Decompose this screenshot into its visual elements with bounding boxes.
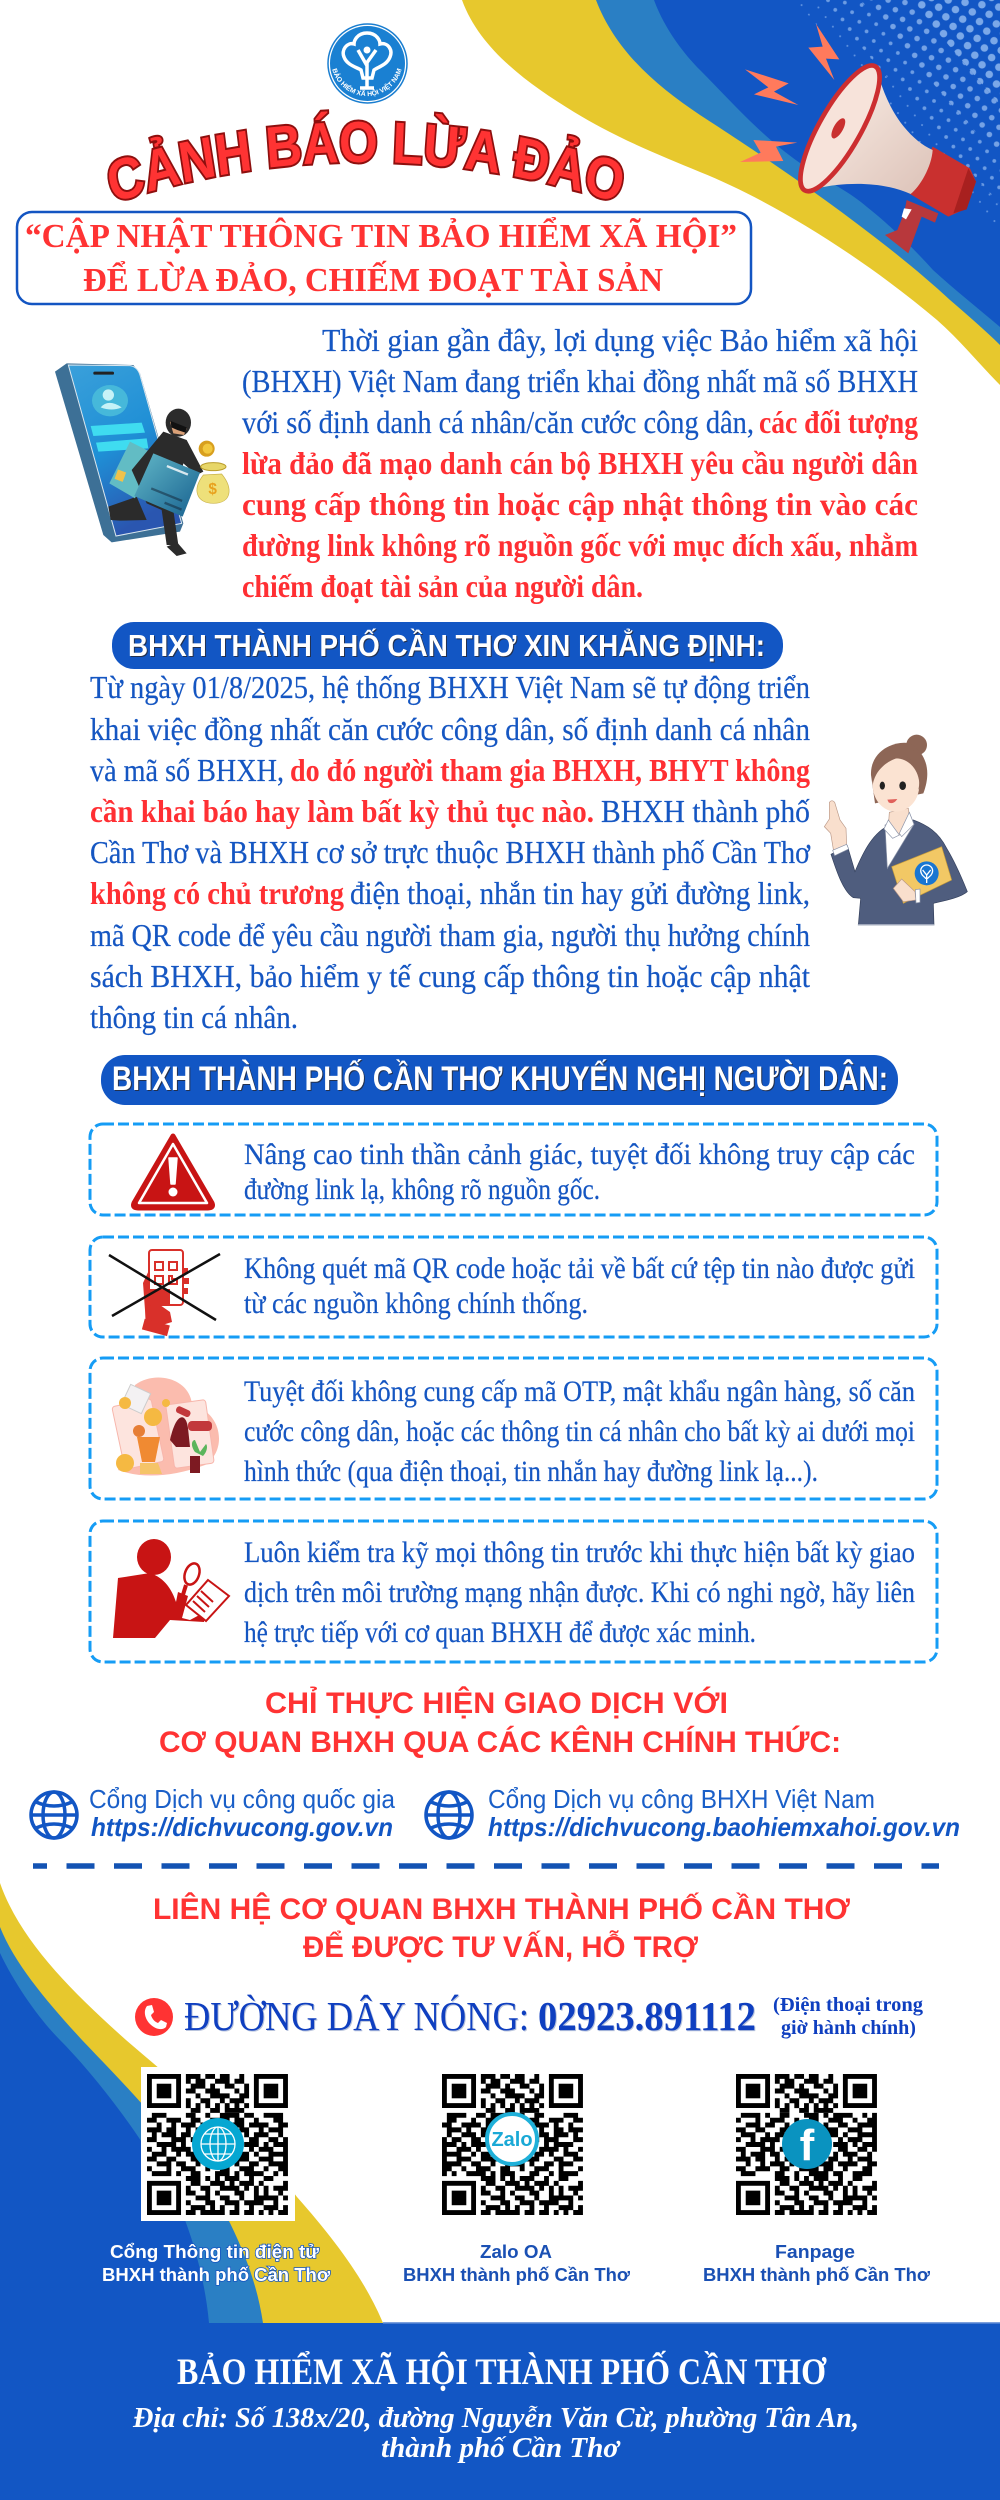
text block: statement paragraph: BHXH thành phố [601,794,810,829]
panel: subtitle box [17,212,751,304]
QR code: Fanpage [736,2076,877,2213]
text block: intro paragraph: đường link không rõ nguồn gốc với mục đích xấu, nhằm [242,528,918,563]
panel: card cảnh giác [90,1124,937,1215]
icon: globe BHXH portal [426,1792,472,1838]
background: top right swoosh [462,0,1000,385]
caption: Zalo: BHXH thành phố Cần Thơ [403,2264,631,2285]
icon: thief with phone and credit card [55,363,229,556]
text block: statement paragraph: điện thoại, nhắn tin hay gửi đường link, [350,876,810,911]
link: national portal: https://dichvucong.gov.vn [91,1812,393,1842]
text: hotline: 02923.891112 [538,1993,756,2039]
text block: statement paragraph: do đó người tham gia BHXH, BHYT không [290,753,810,788]
text: hotline hours [773,1994,923,2039]
panel: footer: Địa chỉ: Số 138x/20, đường Nguyễn Văn Cừ, phường Tân An, [132,2403,859,2434]
text block: statement paragraph: sách BHXH, bảo hiểm y tế cung cấp thông tin hoặc cập nhật [90,959,810,994]
panel: subtitle box: “CẬP NHẬT THÔNG TIN BẢO HIỂM XÃ HỘI” [25,217,737,255]
text block: intro paragraph [242,323,918,604]
heading: liên hệ: ĐỂ ĐƯỢC TƯ VẤN, HỖ TRỢ [303,1930,698,1964]
logo: BHXH emblem: BẢO HIỂM XÃ HỘI VIỆT NAM [332,68,402,96]
text: hotline hours: (Điện thoại trong [773,1994,923,2016]
heading: xin khẳng định: BHXH THÀNH PHỐ CẦN THƠ XIN KHẲNG ĐỊNH: [128,627,765,663]
panel: card OTP: Tuyệt đối không cung cấp mã OTP, mật khẩu ngân hàng, số căn [244,1375,915,1408]
icon: woman officer pointing [824,735,967,925]
heading: kênh chính thức: CƠ QUAN BHXH QUA CÁC KÊNH CHÍNH THỨC: [159,1725,841,1759]
text block: statement paragraph: Từ ngày 01/8/2025, hệ thống BHXH Việt Nam sẽ tự động triển [90,670,810,705]
heading: kênh chính thức: CHỈ THỰC HIỆN GIAO DỊCH VỚI [265,1686,728,1720]
text block: statement paragraph: không có chủ trương [90,876,344,911]
text block: intro paragraph: chiếm đoạt tài sản của người dân. [242,569,643,604]
panel: card cảnh giác: Nâng cao tinh thần cảnh giác, tuyệt đối không truy cập các [244,1138,915,1171]
icon: thief with phone and credit card: $ [208,481,217,498]
caption: Fanpage [703,2241,931,2285]
caption: portal: BHXH thành phố Cần Thơ [102,2264,331,2285]
icon: phone [135,1998,173,2036]
text: hotline hours: giờ hành chính) [781,2017,916,2039]
link: BHXH portal [488,1784,960,1842]
link: national portal [89,1784,396,1842]
icon: crossed out QR phone in hand [109,1250,220,1336]
caption: Fanpage: Fanpage [775,2241,855,2262]
text: hotline: ĐƯỜNG DÂY NÓNG: [184,1993,529,2039]
panel: card mã QR [90,1237,937,1337]
caption: Zalo: Zalo OA [480,2241,552,2262]
text block: statement paragraph: thông tin cá nhân. [90,1000,298,1035]
panel: card OTP: hình thức (qua điện thoại, tin nhắn hay đường link lạ...). [244,1455,818,1488]
panel: card kiểm tra: dịch trên môi trường mạng nhận được. Khi có nghi ngờ, hãy liên [244,1576,915,1609]
panel: footer: thành phố Cần Thơ [381,2433,621,2464]
text block: statement paragraph: cần khai báo hay làm bất kỳ thủ tục nào. [90,794,594,829]
QR code: portal [141,2067,295,2221]
icon: warning triangle [134,1136,212,1208]
caption: portal: Cổng Thông tin điện tử [110,2241,320,2262]
caption: Zalo [403,2241,631,2285]
text block: intro paragraph: (BHXH) Việt Nam đang triển khai đồng nhất mã số BHXH [242,364,918,399]
text block: statement paragraph: mã QR code để yêu cầu người tham gia, người thụ hưởng chính [90,918,810,953]
panel: footer [0,2322,1000,2500]
text block: intro paragraph: với số định danh cá nhân/căn cước công dân, [242,405,754,440]
link: BHXH portal: Cổng Dịch vụ công BHXH Việt Nam [488,1784,875,1814]
text block: statement paragraph: Cần Thơ và BHXH cơ sở trực thuộc BHXH thành phố Cần Thơ [90,835,810,870]
heading: xin khẳng định [112,622,783,669]
text block: intro paragraph: Thời gian gần đây, lợi dụng việc Bảo hiểm xã hội [322,323,918,358]
text block: statement paragraph: khai việc đồng nhất căn cước công dân, số định danh cá nhân [90,712,810,747]
panel: card kiểm tra: Luôn kiểm tra kỹ mọi thông tin trước khi thực hiện bất kỳ giao [244,1536,915,1569]
link: national portal: Cổng Dịch vụ công quốc gia [89,1784,396,1814]
link: BHXH portal: https://dichvucong.baohiemxahoi.gov.vn [488,1812,960,1842]
panel: card OTP [90,1358,937,1499]
QR code: Fanpage: f [800,2121,815,2170]
heading: liên hệ [153,1892,850,1964]
panel: card cảnh giác: đường link lạ, không rõ nguồn gốc. [244,1173,600,1206]
heading: kênh chính thức [159,1686,841,1759]
text block: intro paragraph: các đối tượng [759,405,918,440]
panel: card kiểm tra [90,1521,937,1662]
text block: statement paragraph [90,670,810,1035]
icon: scam conversation illustration [112,1378,219,1475]
text block: statement paragraph: và mã số BHXH, [90,753,284,788]
panel: subtitle box: ĐỂ LỪA ĐẢO, CHIẾM ĐOẠT TÀI SẢN [83,260,663,299]
text: hotline [184,1993,756,2039]
icon: globe national portal [31,1792,77,1838]
heading: liên hệ: LIÊN HỆ CƠ QUAN BHXH THÀNH PHỐ CẦN THƠ [153,1892,850,1926]
panel: footer: BẢO HIỂM XÃ HỘI THÀNH PHỐ CẦN THƠ [177,2349,827,2393]
caption: Fanpage: BHXH thành phố Cần Thơ [703,2264,931,2285]
panel: card mã QR: Không quét mã QR code hoặc tải về bất cứ tệp tin nào được gửi [244,1252,915,1285]
background: bottom left swoosh [0,1883,383,2323]
panel: card mã QR: từ các nguồn không chính thống. [244,1287,588,1320]
caption: portal [102,2241,331,2285]
QR code: Zalo: Zalo [491,2129,533,2151]
icon: megaphone with bolts [740,24,976,253]
title: Cảnh báo lừa đảo: CẢNH BÁO LỪA ĐẢO [107,109,624,201]
heading: khuyến nghị người dân [101,1055,898,1105]
logo: BHXH emblem [327,23,408,104]
text block: intro paragraph: lừa đảo đã mạo danh cán bộ BHXH yêu cầu người dân [242,446,918,481]
panel: card kiểm tra: hệ trực tiếp với cơ quan BHXH để được xác minh. [244,1616,756,1649]
QR code: Zalo [442,2076,583,2213]
icon: person inspecting document [113,1539,229,1638]
text block: intro paragraph: cung cấp thông tin hoặc cập nhật thông tin vào các [242,487,918,522]
